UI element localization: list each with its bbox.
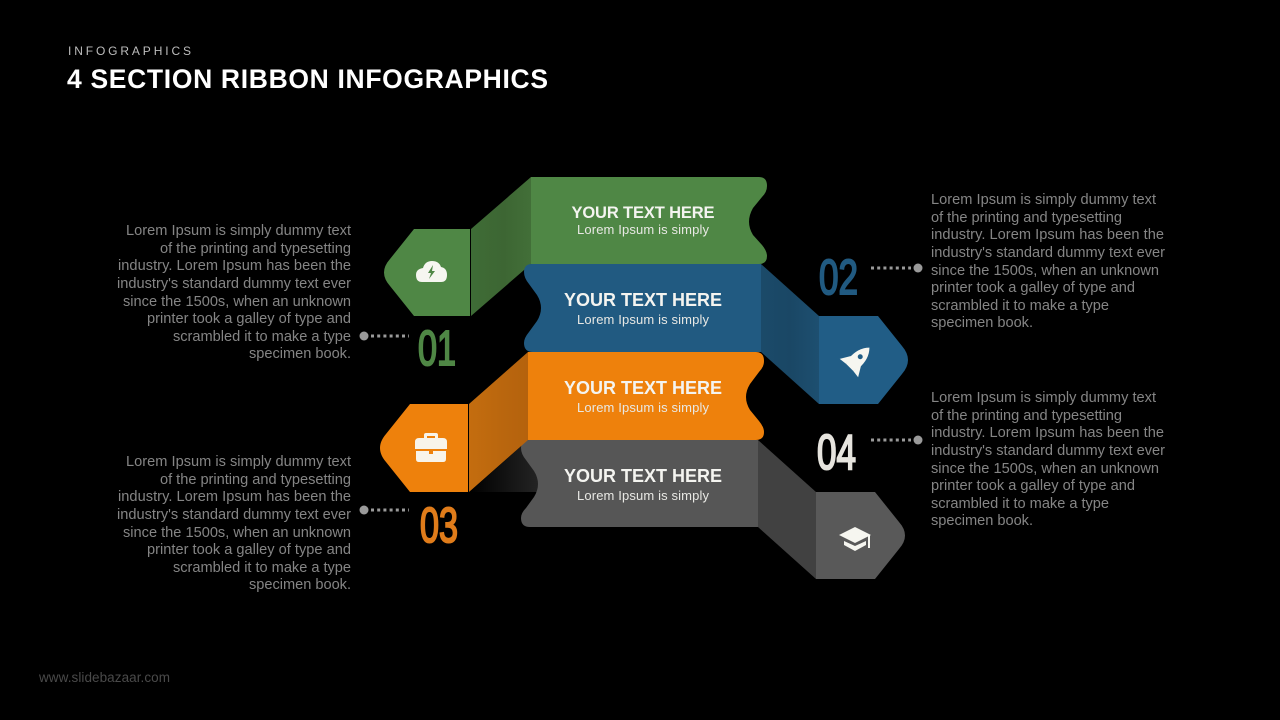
text block 04: since the 1500s, when an unknown (931, 461, 1159, 477)
band text: blue: YOUR TEXT HERE (564, 290, 722, 310)
text block 01: of the printing and typesetting (160, 241, 351, 257)
hexagon tab: grey (816, 492, 905, 579)
text block 04: Lorem Ipsum is simply dummy text (931, 390, 1156, 406)
band text: orange: YOUR TEXT HERE (564, 378, 722, 398)
number 04: 04 (817, 426, 856, 480)
text block 03: scrambled it to make a type (173, 560, 351, 576)
icon: briefcase (415, 433, 447, 462)
text block 02: industry's standard dummy text ever (931, 245, 1165, 261)
band text: green: Lorem Ipsum is simply (577, 222, 710, 237)
band text: blue (564, 290, 722, 327)
text block 02: of the printing and typesetting (931, 210, 1122, 226)
number 01: 01 (418, 322, 456, 376)
band text: orange: Lorem Ipsum is simply (577, 400, 710, 415)
text block 01: scrambled it to make a type (173, 329, 351, 345)
number 03: 03 (420, 499, 458, 553)
text block 03: of the printing and typesetting (160, 472, 351, 488)
text block 03: specimen book. (249, 577, 351, 593)
text block 04: printer took a galley of type and (931, 478, 1135, 494)
text block 02: specimen book. (931, 315, 1033, 331)
shadow under orange fold (470, 440, 545, 492)
text block 02 (931, 192, 1165, 331)
connector 03 (360, 506, 409, 514)
title: 4 SECTION RIBBON INFOGRAPHICS (67, 64, 548, 94)
band text: grey: Lorem Ipsum is simply (577, 488, 710, 503)
band: green (531, 177, 767, 264)
band text: green: YOUR TEXT HERE (572, 204, 714, 222)
band text: green (572, 204, 714, 237)
text block 02: industry. Lorem Ipsum has been the (931, 227, 1164, 243)
text block 04: industry. Lorem Ipsum has been the (931, 425, 1164, 441)
text block 04: of the printing and typesetting (931, 408, 1122, 424)
text block 02: since the 1500s, when an unknown (931, 263, 1159, 279)
band text: orange (564, 378, 722, 415)
text block 01: industry's standard dummy text ever (117, 276, 351, 292)
connector 04 (871, 436, 922, 444)
text block 03: printer took a galley of type and (147, 542, 351, 558)
hexagon tab: orange (380, 404, 468, 492)
text block 01: specimen book. (249, 346, 351, 362)
ribbon section 1: green (384, 177, 767, 316)
text block 03: industry. Lorem Ipsum has been the (118, 489, 351, 505)
footer url: www.slidebazaar.com (38, 670, 170, 685)
text block 03 (117, 454, 351, 593)
band: grey (521, 440, 758, 527)
text block 01: Lorem Ipsum is simply dummy text (126, 223, 351, 239)
text block 03: industry's standard dummy text ever (117, 507, 351, 523)
text block 01 (117, 223, 351, 362)
connector 02 (871, 264, 922, 272)
text block 01: since the 1500s, when an unknown (123, 294, 351, 310)
connector 01 (360, 332, 409, 340)
ribbon section 3: orange (380, 352, 764, 492)
text block 01: industry. Lorem Ipsum has been the (118, 258, 351, 274)
band: orange (528, 352, 764, 440)
icon: rocket (840, 338, 879, 377)
text block 02: printer took a galley of type and (931, 280, 1135, 296)
ribbon section 4: grey (470, 440, 905, 579)
text block 01: printer took a galley of type and (147, 311, 351, 327)
icon: graduation cap (839, 527, 871, 551)
text block 02: scrambled it to make a type (931, 298, 1109, 314)
band text: grey: YOUR TEXT HERE (564, 466, 722, 486)
text block 04: specimen book. (931, 513, 1033, 529)
text block 03: Lorem Ipsum is simply dummy text (126, 454, 351, 470)
hexagon tab: blue (819, 316, 908, 404)
text block 04 (931, 390, 1165, 529)
text block 04: industry's standard dummy text ever (931, 443, 1165, 459)
ribbon section 2: blue (524, 264, 908, 404)
icon: cloud with lightning bolt (416, 261, 447, 282)
band text: grey (564, 466, 722, 503)
band text: blue: Lorem Ipsum is simply (577, 312, 710, 327)
number 02: 02 (819, 251, 858, 305)
band: blue (524, 264, 761, 352)
eyebrow heading: INFOGRAPHICS (68, 44, 191, 58)
text block 02: Lorem Ipsum is simply dummy text (931, 192, 1156, 208)
text block 03: since the 1500s, when an unknown (123, 525, 351, 541)
hexagon tab: green (384, 229, 470, 316)
text block 04: scrambled it to make a type (931, 496, 1109, 512)
